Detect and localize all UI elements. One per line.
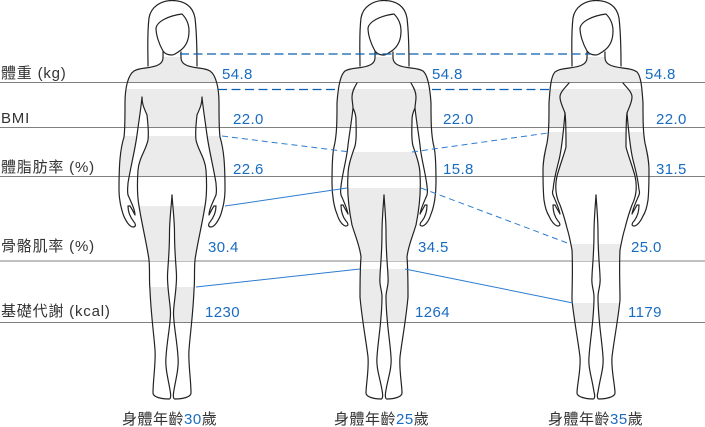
row label: body fat: 體脂肪率 (%) xyxy=(1,159,95,176)
values: age 25: 22.0 xyxy=(443,111,474,128)
figure: age 25 body xyxy=(331,0,437,400)
row label: weight: 體重 (kg) xyxy=(1,65,67,82)
values: age 35: 54.8 xyxy=(645,66,676,83)
chest contour lines xyxy=(352,83,416,108)
values: age 25: 15.8 xyxy=(443,161,474,178)
values: age 25: 54.8 xyxy=(432,66,463,83)
values: age 30: 22.0 xyxy=(233,111,264,128)
values: age 30: 1230 xyxy=(205,304,240,321)
row divider lines xyxy=(0,82,705,322)
row label: BMI: BMI xyxy=(1,110,30,127)
values: age 35: 22.0 xyxy=(656,111,687,128)
values: age 30: 22.6 xyxy=(233,161,264,178)
chest contour lines xyxy=(560,83,632,113)
values: age 35: 1179 xyxy=(628,304,662,321)
connector: body fat xyxy=(222,133,548,152)
row label: skeletal muscle: 骨骼肌率 (%) xyxy=(1,238,95,255)
connector: body weight xyxy=(180,54,590,90)
values: age 30 xyxy=(205,66,264,321)
values: age 25: 1264 xyxy=(415,304,450,321)
values: age 30: 54.8 xyxy=(222,66,253,83)
values: age 35: 25.0 xyxy=(631,239,662,256)
connector: muscle xyxy=(225,188,570,244)
figure: age 30 body xyxy=(112,0,232,399)
connector: metabolism xyxy=(196,269,573,303)
values: age 35 xyxy=(628,66,687,321)
row label: basal metabolism: 基礎代謝 (kcal) xyxy=(1,303,111,320)
values: age 30: 30.4 xyxy=(208,239,239,256)
values: age 25: 34.5 xyxy=(418,239,449,256)
values: age 25 xyxy=(415,66,474,321)
values: age 35: 31.5 xyxy=(656,161,687,178)
figure: age 35 body xyxy=(536,0,656,399)
